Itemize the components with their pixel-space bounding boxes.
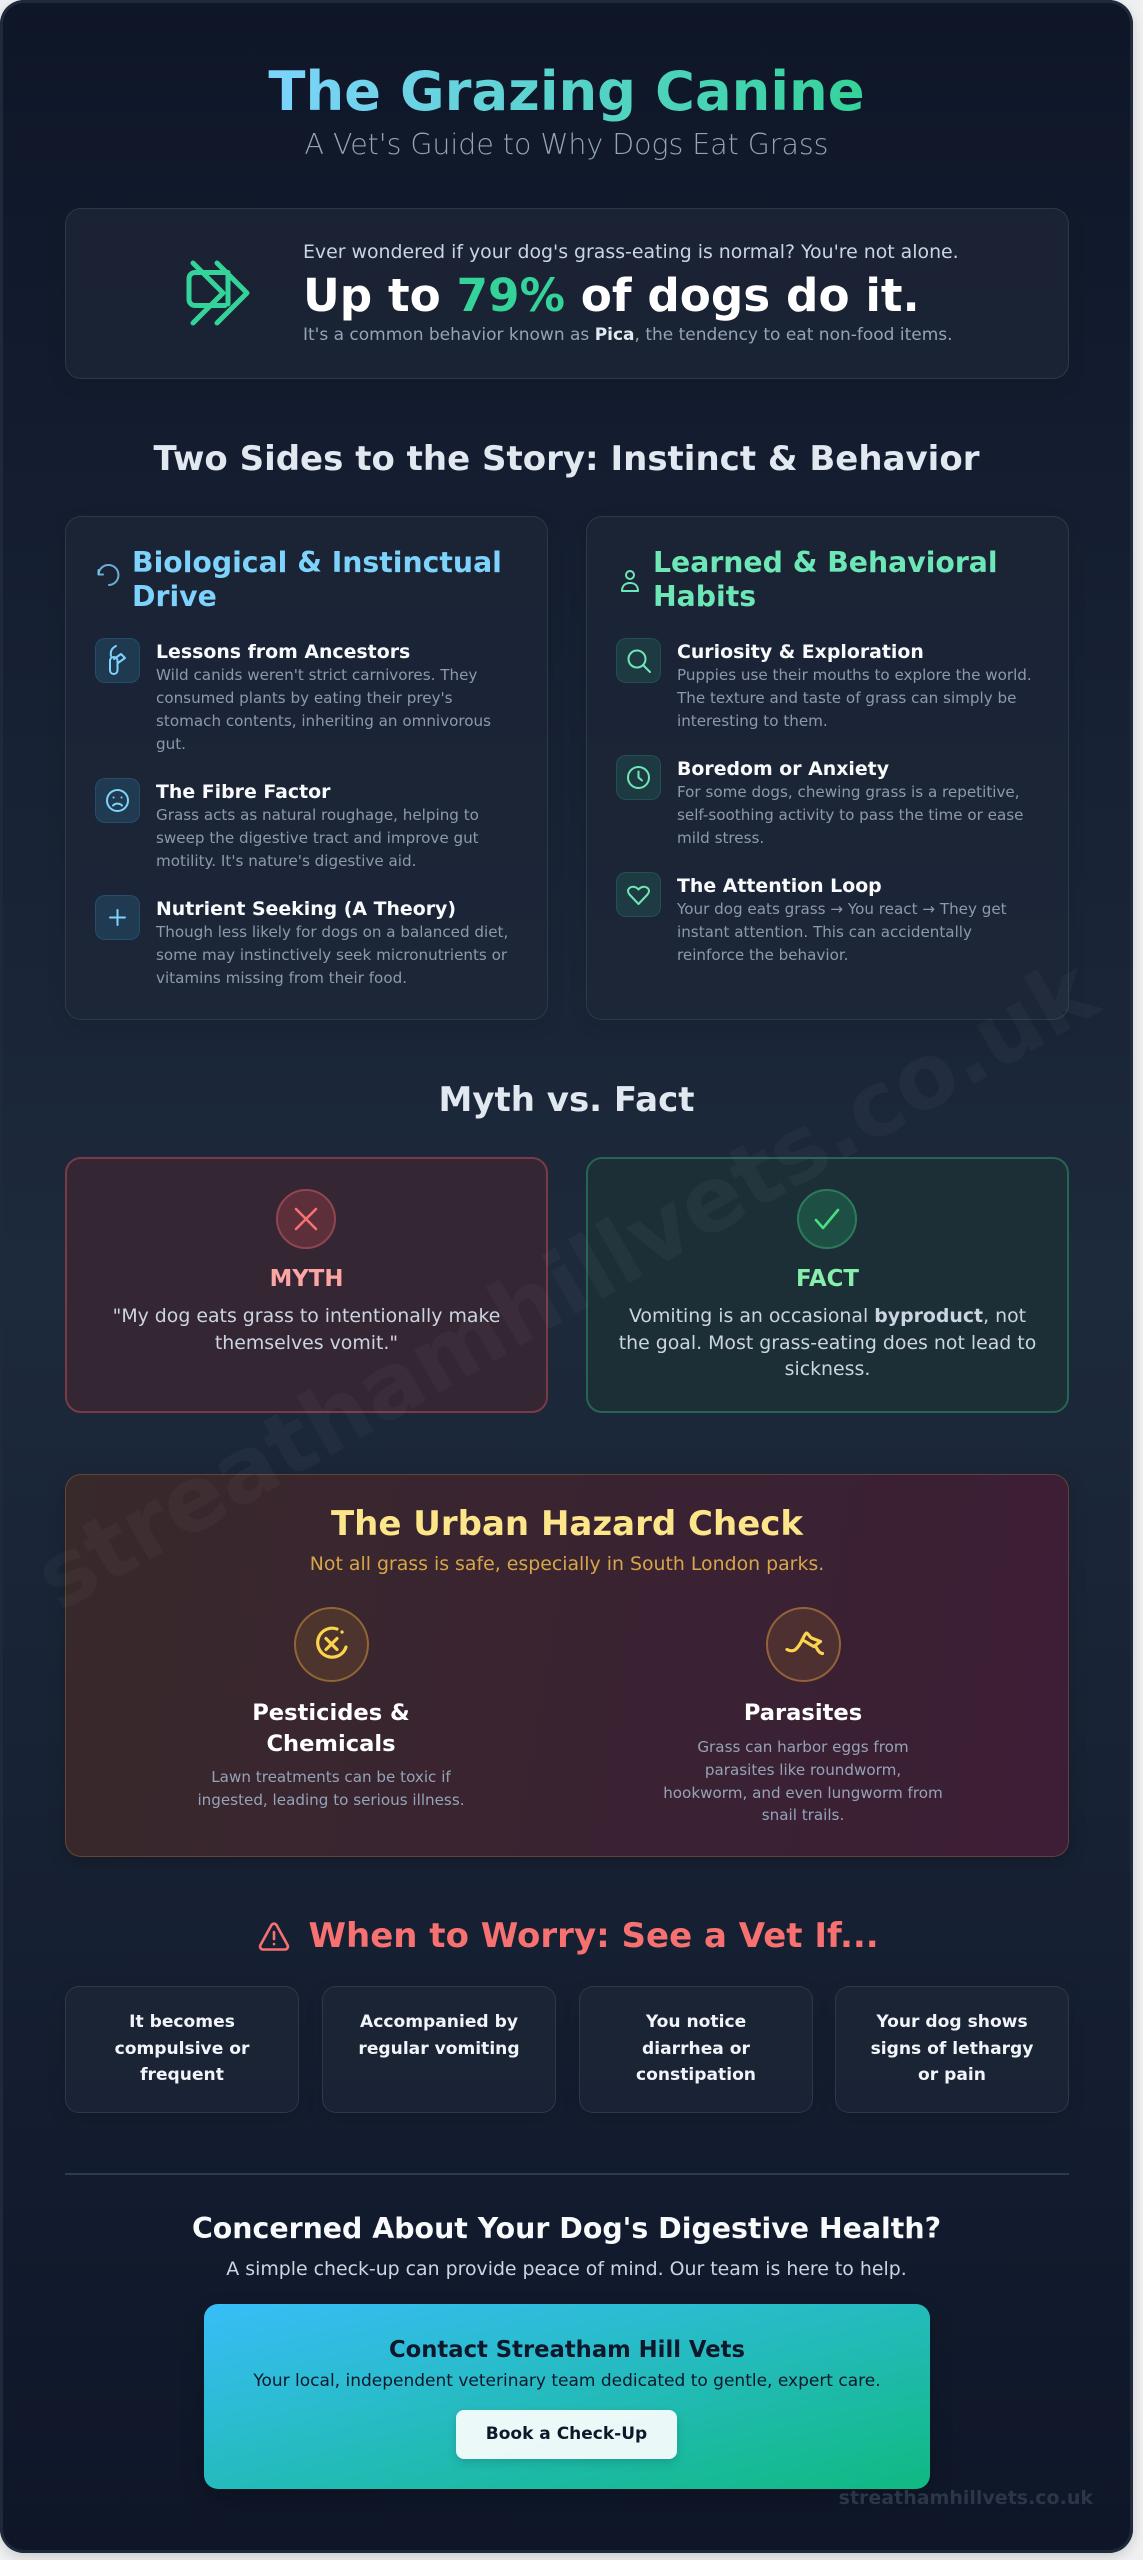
stat intro text: Ever wondered if your dog's grass-eating is normal? You're not alone. [303, 241, 959, 263]
call to action heading: Concerned About Your Dog's Digestive Health? [192, 2212, 941, 2245]
footer watermark: streathamhillvets.co.uk [839, 2487, 1093, 2509]
panel: contact [204, 2304, 930, 2489]
hazard title: The Urban Hazard Check [331, 1504, 803, 1544]
hazard text: snail trails. [762, 1806, 844, 1824]
icon: rotate arrow [98, 564, 120, 586]
icon: plus [95, 895, 140, 940]
item text: Your dog eats grass → You react → They get [677, 900, 1007, 918]
item text [156, 923, 508, 987]
item text: motility. It's nature's digestive aid. [156, 852, 416, 870]
icon: warning triangle [258, 1922, 290, 1951]
fact text [619, 1305, 1036, 1380]
icon: hand [95, 638, 140, 683]
item text: Grass acts as natural roughage, helping to [156, 806, 479, 824]
item: boredom [616, 755, 1023, 847]
item text: interesting to them. [677, 712, 828, 730]
icon: check [797, 1189, 857, 1249]
panel heading [132, 546, 502, 613]
item text [677, 900, 1007, 964]
card: lethargy: signs of lethargy [871, 2038, 1033, 2058]
hazard text: hookworm, and even lungworm from [663, 1784, 943, 1802]
hazard title: Pesticides & [252, 1700, 410, 1726]
item text: Puppies use their mouths to explore the world. [677, 666, 1032, 684]
item text: The texture and taste of grass can simply be [677, 689, 1016, 707]
item: nutrients [95, 895, 508, 987]
card: compulsive: frequent [140, 2065, 224, 2085]
item text: self-soothing activity to pass the time or ease [677, 806, 1023, 824]
heading: when to worry: When to Worry: See a Vet If... [308, 1916, 879, 1956]
panel: learned habits [586, 516, 1069, 1020]
icon: clock [616, 755, 661, 800]
myth label: MYTH [270, 1266, 343, 1292]
panel: biological drive [65, 516, 548, 1020]
item text: For some dogs, chewing grass is a repetitive, [677, 783, 1020, 801]
item: curiosity [616, 638, 1032, 730]
contact title: Contact Streatham Hill Vets [389, 2337, 745, 2363]
item text [677, 783, 1023, 847]
item title: Curiosity & Exploration [677, 641, 924, 663]
panel: urban hazard check [65, 1474, 1069, 1857]
item text [156, 666, 491, 753]
item text [156, 806, 479, 870]
subtitle: A Vet's Guide to Why Dogs Eat Grass [305, 128, 828, 161]
background watermark: streathamhillvets.co.uk [18, 938, 1114, 1631]
item text: stomach contents, inheriting an omnivorous [156, 712, 491, 730]
item title: Lessons from Ancestors [156, 641, 410, 663]
fact text: the goal. Most grass-eating does not lead to [619, 1332, 1036, 1354]
hazard title: Parasites [744, 1700, 862, 1726]
icon: chemical [294, 1607, 368, 1682]
hazard text [197, 1768, 465, 1809]
hazard text: ingested, leading to serious illness. [197, 1791, 465, 1809]
myth text [113, 1305, 500, 1354]
button: Book a Check-Up [486, 2424, 647, 2444]
item title: The Fibre Factor [156, 781, 330, 803]
myth text: "My dog eats grass to intentionally make [113, 1305, 500, 1327]
card: lethargy: Your dog shows [876, 2012, 1028, 2032]
item text: Wild canids weren't strict carnivores. They [156, 666, 477, 684]
item text: mild stress. [677, 829, 764, 847]
card: compulsive [65, 1986, 299, 2113]
icon: person [621, 570, 639, 592]
hazard text [663, 1738, 943, 1824]
item text: instant attention. This can accidentally [677, 923, 972, 941]
card: diarrhea: You notice [646, 2012, 746, 2032]
button [456, 2410, 677, 2459]
card: diarrhea: constipation [636, 2065, 756, 2085]
panel heading: Learned & Behavioral [653, 546, 998, 579]
heading: myth vs fact: Myth vs. Fact [438, 1080, 695, 1120]
panel: fact [586, 1157, 1069, 1413]
panel: myth [65, 1157, 548, 1413]
hazard text: parasites like roundworm, [705, 1761, 901, 1779]
card: vomiting [322, 1986, 556, 2113]
fact label: FACT [796, 1266, 859, 1292]
card: diarrhea [579, 1986, 813, 2113]
item text: reinforce the behavior. [677, 946, 848, 964]
card: vomiting: regular vomiting [358, 2038, 520, 2058]
icon: face [95, 778, 140, 823]
panel heading: Drive [132, 580, 217, 613]
item: fibre [95, 778, 479, 870]
heading: two sides: Two Sides to the Story: Instinct & Behavior [154, 439, 979, 479]
fact text: sickness. [785, 1358, 870, 1380]
card: vomiting: Accompanied by [360, 2012, 518, 2032]
item: ancestors [95, 638, 491, 753]
stat note: It's a common behavior known as Pica, the tendency to eat non-food items. [303, 325, 953, 345]
card: lethargy: or pain [918, 2065, 986, 2085]
item text: Though less likely for dogs on a balanced diet, [156, 923, 508, 941]
stat headline: Up to 79% of dogs do it. [303, 269, 920, 322]
item: attention [616, 872, 1007, 964]
panel heading: Habits [653, 580, 756, 613]
hazard subtitle: Not all grass is safe, especially in South London parks. [310, 1553, 824, 1575]
item title: The Attention Loop [677, 875, 882, 897]
card: compulsive: It becomes [129, 2012, 235, 2032]
card: lethargy [835, 1986, 1069, 2113]
hazard text: Grass can harbor eggs from [697, 1738, 909, 1756]
icon: magnifier [616, 638, 661, 683]
icon: worm [766, 1607, 840, 1682]
panel heading: Biological & Instinctual [132, 546, 502, 579]
card: compulsive: compulsive or [115, 2038, 249, 2058]
call to action text: A simple check-up can provide peace of mind. Our team is here to help. [226, 2258, 907, 2280]
item text: consumed plants by eating their prey's [156, 689, 453, 707]
icon: cross [276, 1189, 336, 1249]
title: The Grazing Canine [268, 60, 865, 123]
item text [676, 666, 1032, 730]
icon: heart [616, 872, 661, 917]
item text: vitamins missing from their food. [156, 969, 407, 987]
item text: gut. [156, 735, 186, 753]
item title: Nutrient Seeking (A Theory) [156, 898, 456, 920]
hazard text: Lawn treatments can be toxic if [211, 1768, 451, 1786]
card: diarrhea: diarrhea or [642, 2038, 750, 2058]
hazard: pesticides [197, 1607, 465, 1809]
icon: double chevron [186, 260, 250, 326]
hazard title: Chemicals [266, 1731, 396, 1757]
myth text: themselves vomit." [215, 1332, 398, 1354]
hazard title [252, 1700, 410, 1757]
item text: sweep the digestive tract and improve gut [156, 829, 479, 847]
item text: some may instinctively seek micronutrients or [156, 946, 507, 964]
hazard: parasites [663, 1607, 943, 1824]
item title: Boredom or Anxiety [677, 758, 889, 780]
fact text: Vomiting is an occasional byproduct, not [629, 1305, 1026, 1327]
panel heading [653, 546, 998, 613]
contact text: Your local, independent veterinary team dedicated to gentle, expert care. [253, 2370, 881, 2390]
panel: key statistic [65, 208, 1069, 379]
